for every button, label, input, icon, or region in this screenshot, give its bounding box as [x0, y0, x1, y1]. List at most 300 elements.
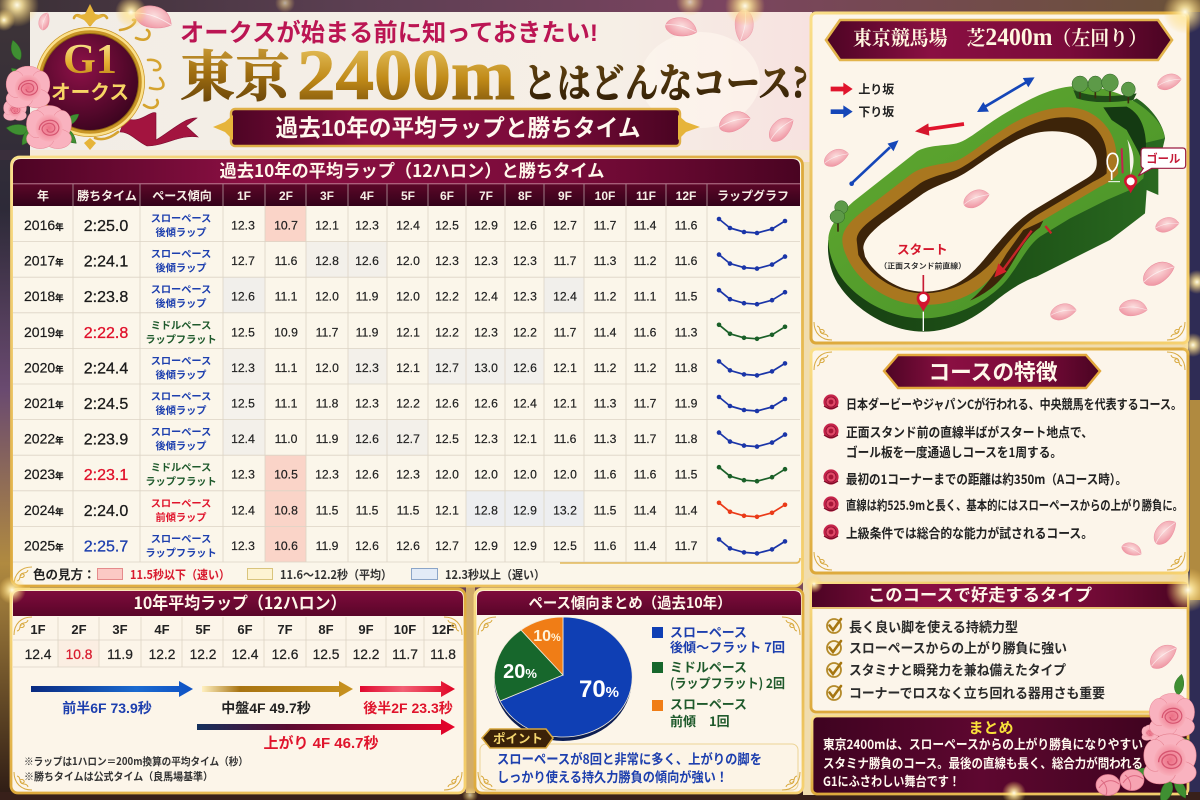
column headers: 1F [237, 189, 251, 203]
legend: downhill [831, 105, 894, 119]
row 2019: 12.2 [435, 325, 459, 339]
row 2020: 12.3 [355, 361, 379, 375]
mini table: 11.8 [430, 647, 456, 662]
summary text: 東京2400mは、スローペースからの上がり勝負になりやすい [823, 734, 1143, 753]
stand recess [1103, 107, 1146, 168]
row 2018 [24, 284, 787, 310]
row 2024: 12.4 [231, 503, 255, 517]
row 2022: 11.6 [554, 432, 577, 446]
feature 2: ゴール板を一度通過しコースを1周する。 [846, 442, 1062, 461]
row 2021: 11.3 [594, 396, 617, 410]
row 2021 [24, 391, 787, 417]
row 2023: 11.6 [594, 468, 617, 482]
feature 5: 上級条件では総合的な能力が試されるコース。 [846, 523, 1093, 542]
row 2025: 12.7 [435, 539, 459, 553]
goal label [1138, 148, 1186, 176]
row 2025: スローペース [151, 533, 211, 545]
row 2019: 11.7 [554, 325, 577, 339]
row 2021: スローペース [151, 391, 211, 403]
badge: G1 オークス [35, 4, 198, 150]
row 2021: 12.3 [355, 396, 379, 410]
mini table: 3F [112, 622, 128, 637]
table title: 過去10年の平均ラップ（12ハロン）と勝ちタイム [220, 158, 604, 183]
row 2025: 12.9 [474, 539, 498, 553]
label: last 4F: 上がり 4F 46.7秒 [264, 734, 378, 752]
row 2025: ラップフラット [145, 547, 217, 559]
row 2016 [24, 213, 787, 239]
column headers: 勝ちタイム [77, 188, 137, 203]
row 2023: 12.0 [513, 468, 537, 482]
pie legend: 後傾〜フラット 7回 [670, 637, 785, 656]
row 2020: 2:24.4 [84, 360, 128, 377]
row 2017: 11.2 [634, 254, 657, 268]
row 2021: 12.6 [435, 396, 459, 410]
subtitle banner [213, 109, 700, 146]
row 2023: 12.0 [435, 468, 459, 482]
column headers: ラップグラフ [717, 188, 789, 203]
row 2018: 2018年 [24, 288, 64, 304]
row 2025: 12.6 [396, 539, 420, 553]
row 2018: 12.6 [231, 290, 255, 304]
row 2025: 11.9 [316, 539, 339, 553]
mini table: 4F [154, 622, 170, 637]
row 2023: 2023年 [24, 466, 64, 482]
column headers: 5F [401, 189, 415, 203]
column headers: 4F [360, 189, 374, 203]
row 2019: 12.3 [474, 325, 498, 339]
row 2021: 2:24.5 [84, 396, 128, 413]
footnotes: ※勝ちタイムは公式タイム（良馬場基準） [24, 769, 213, 784]
row 2021: 11.7 [634, 396, 657, 410]
row 2017: 12.3 [513, 254, 537, 268]
panel: 10-year table [12, 157, 802, 586]
row 2020: 13.0 [474, 361, 498, 375]
row 2024: 12.1 [435, 503, 459, 517]
G1: G1 [63, 37, 117, 83]
row 2021: 12.4 [513, 396, 537, 410]
features banner: コースの特徴 [928, 360, 1058, 385]
corner ornaments [14, 322, 1185, 790]
arrow: descent top [978, 78, 1034, 112]
row 2019: 12.2 [513, 325, 537, 339]
goal post [1107, 153, 1120, 182]
row 2022: 2022年 [24, 431, 64, 447]
row 2016: スローペース [151, 213, 211, 225]
panel title: このコースで好走するタイプ [868, 581, 1092, 606]
row 2016: 12.3 [231, 218, 255, 232]
mini table: 12.2 [353, 647, 379, 662]
course illustration [828, 74, 1186, 332]
row 2025: 11.4 [634, 539, 657, 553]
row 2021: 11.1 [275, 396, 298, 410]
row 2017: 2:24.1 [84, 254, 128, 271]
row 2022: 12.4 [231, 432, 255, 446]
row 2017: 2017年 [24, 253, 64, 269]
cell shading [223, 206, 584, 562]
summary roses [1096, 673, 1196, 800]
row 2020: 11.1 [275, 361, 298, 375]
mini table: 1F [30, 622, 46, 637]
panel: course features [811, 349, 1188, 573]
mini table: 7F [277, 622, 293, 637]
row 2017: 12.6 [355, 254, 379, 268]
row 2024: 12.9 [513, 503, 537, 517]
column headers: ペース傾向 [152, 188, 212, 203]
row 2022: 12.6 [355, 432, 379, 446]
column headers: 9F [558, 189, 572, 203]
turf surface [828, 86, 1164, 318]
row 2020: 後傾ラップ [156, 368, 206, 381]
panel: 10-year average lap [11, 589, 465, 793]
row 2023: ラップフラット [145, 476, 217, 488]
row 2019: 2:22.8 [84, 325, 128, 342]
pie legend: 前傾 1回 [670, 711, 730, 730]
arrow: middle [202, 681, 353, 697]
row 2022: 11.3 [594, 432, 617, 446]
mini table: 11.9 [107, 647, 133, 662]
row 2024: 前傾ラップ [156, 511, 206, 524]
row 2019: ミドルペース [151, 320, 211, 332]
point callout [480, 729, 798, 790]
panel title: 10年平均ラップ（12ハロン） [134, 589, 346, 614]
summary text: G1にふさわしい舞台です！ [823, 771, 960, 790]
row 2024: 10.8 [274, 503, 298, 517]
row 2019: 2019年 [24, 324, 64, 340]
row 2018: 12.4 [553, 290, 577, 304]
start note: （正面スタンド前直線） [879, 261, 966, 271]
row 2024: 12.8 [474, 503, 498, 517]
legend: uphill: 上り坂 [858, 82, 894, 96]
column headers: 2F [279, 189, 293, 203]
mini table: 12.6 [272, 647, 299, 662]
row 2023: 10.5 [274, 468, 298, 482]
mini table: 5F [195, 622, 211, 637]
start label: スタート [897, 243, 948, 257]
row 2020: スローペース [151, 355, 211, 367]
row 2023: 12.6 [355, 468, 379, 482]
row 2016: 11.6 [675, 218, 698, 232]
row 2021: 12.6 [474, 396, 498, 410]
row 2023: ミドルペース [151, 462, 211, 474]
column headers: 10F [595, 189, 615, 203]
trees: left [830, 201, 848, 232]
pie legend: スローペース [670, 694, 747, 713]
arrow: last 2F [360, 681, 455, 697]
row 2020: 12.1 [396, 361, 420, 375]
row 2018: 12.4 [474, 290, 498, 304]
row 2021: 12.5 [231, 396, 255, 410]
sub headline: オークスが始まる前に知っておきたい! [180, 18, 598, 47]
mini table: 10.8 [66, 647, 93, 662]
column headers: 3F [320, 189, 334, 203]
main title [180, 33, 808, 115]
row 2025: 12.3 [231, 539, 255, 553]
goal lines [1122, 148, 1123, 173]
pie chart [494, 617, 632, 741]
row 2020: 12.7 [435, 361, 459, 375]
row 2018: 11.2 [594, 290, 617, 304]
summary text: スタミナ勝負のコース。最後の直線も長く、総合力が問われる [823, 753, 1143, 772]
trees: back straight [1072, 74, 1137, 103]
point badge: ポイント [493, 731, 543, 746]
row 2021: 11.9 [675, 396, 698, 410]
feature 2 [823, 422, 1093, 461]
row 2016: 11.4 [634, 218, 657, 232]
arrow: rise [915, 123, 964, 136]
main title: とはどんなコース? [523, 52, 808, 109]
row 2017: スローペース [151, 249, 211, 261]
gold scrollwork [74, 15, 163, 139]
ribbon [120, 113, 198, 146]
row 2016: 12.9 [474, 218, 498, 232]
mini table: 12.2 [190, 647, 216, 662]
legend: colour key: 色の見方： [33, 564, 96, 583]
arrow: descent left [849, 141, 897, 186]
row 2022: スローペース [151, 427, 211, 439]
row 2025: 11.7 [675, 539, 698, 553]
main title: 2400m [297, 35, 515, 115]
feature 2: 正面スタンド前の直線半ばがスタート地点で、 [846, 422, 1093, 441]
summary text [823, 734, 1143, 790]
row 2019: ラップフラット [145, 334, 217, 346]
row 2016: 12.3 [355, 218, 379, 232]
row 2019: 11.3 [675, 325, 698, 339]
goal pin [1124, 174, 1137, 193]
row 2024: 11.4 [675, 503, 698, 517]
type 4: コーナーでロスなく立ち回れる器用さも重要 [849, 682, 1105, 702]
row 2020: 12.1 [553, 361, 577, 375]
pie legend: ミドルペース [670, 657, 747, 676]
row 2022: 12.3 [474, 432, 498, 446]
header petals [36, 1, 798, 145]
arrow: last 4F [197, 719, 455, 735]
row 2024: 2:24.0 [84, 503, 128, 520]
row 2018: 11.1 [275, 290, 298, 304]
row 2019: 11.7 [316, 325, 339, 339]
row 2022: 11.9 [316, 432, 339, 446]
column headers: 12F [676, 189, 696, 203]
row 2018: 12.0 [315, 290, 339, 304]
pie chart: 10% [533, 628, 561, 645]
legend: downhill: 下り坂 [858, 105, 894, 119]
row 2017: 12.0 [396, 254, 420, 268]
row 2019: 11.4 [594, 325, 617, 339]
type 3: スタミナと瞬発力を兼ね備えたタイプ [849, 659, 1066, 679]
row 2018: 12.2 [435, 290, 459, 304]
row 2023: 12.0 [553, 468, 577, 482]
row 2017: 11.7 [554, 254, 577, 268]
panel: suited type [811, 581, 1188, 712]
arrow: first half [31, 681, 193, 697]
subtitle banner: 過去10年の平均ラップと勝ちタイム [276, 115, 640, 141]
オークス: オークス [51, 81, 129, 104]
row 2023 [24, 462, 787, 488]
row 2024: 11.5 [397, 503, 420, 517]
legend: colour key: 12.3秒以上（遅い） [445, 566, 545, 583]
row 2016: 12.1 [315, 218, 339, 232]
row 2023: 12.3 [231, 468, 255, 482]
row 2024 [24, 498, 787, 524]
point callout: スローペースが8回と非常に多く、上がりの脚を [497, 748, 762, 768]
footnotes [24, 754, 248, 784]
row 2020: 11.8 [675, 361, 698, 375]
row 2017: 12.3 [474, 254, 498, 268]
column headers: 7F [479, 189, 493, 203]
point badge [482, 729, 553, 748]
mini table: 12F [432, 622, 454, 637]
row 2024: 11.5 [316, 503, 339, 517]
row 2023: 12.0 [474, 468, 498, 482]
lower bank wedge [970, 221, 1043, 301]
row 2016: 12.5 [435, 218, 459, 232]
row 2018: 2:23.8 [84, 289, 128, 306]
mini table: 10F [394, 622, 416, 637]
row 2025: 12.6 [355, 539, 379, 553]
row 2017: 12.3 [435, 254, 459, 268]
pie legend [652, 622, 785, 730]
row 2021: 2021年 [24, 395, 64, 411]
column headers: 11F [636, 189, 656, 203]
features banner [884, 355, 1100, 388]
row 2025: 12.5 [553, 539, 577, 553]
row 2024: 13.2 [553, 503, 577, 517]
row 2020 [24, 355, 787, 381]
pie chart: 20% [503, 661, 537, 683]
row 2016: 2:25.0 [84, 218, 128, 235]
label: last 2F: 後半2F 23.3秒 [363, 700, 453, 716]
row 2023: 12.3 [396, 468, 420, 482]
row 2020: 11.2 [634, 361, 657, 375]
row 2024: 11.4 [634, 503, 657, 517]
mini table: 8F [318, 622, 334, 637]
row 2023: 11.5 [675, 468, 698, 482]
row 2019: 11.9 [356, 325, 379, 339]
column headers [37, 184, 789, 206]
column headers: 年 [37, 188, 49, 203]
badge roses [4, 39, 81, 149]
course banner [826, 20, 1172, 60]
legend: colour key: 11.5秒以下（速い） [130, 566, 230, 583]
course banner: 東京競馬場 芝2400m（左回り） [853, 22, 1147, 51]
row 2017: 11.3 [594, 254, 617, 268]
row 2019: 12.5 [231, 325, 255, 339]
row 2016: 後傾ラップ [156, 226, 206, 239]
row 2020: 12.3 [231, 361, 255, 375]
row 2018: 11.1 [634, 290, 657, 304]
row 2023: 11.6 [634, 468, 657, 482]
pie chart: 70% [579, 676, 619, 703]
footnotes: ※ラップは1ハロン＝200m換算の平均タイム（秒） [24, 754, 248, 769]
panel: course map [811, 13, 1188, 343]
row 2021: 11.8 [316, 396, 339, 410]
grid [13, 206, 800, 562]
downhill marker [1002, 226, 1051, 272]
row 2020: 12.6 [513, 361, 537, 375]
row 2021: 12.2 [396, 396, 420, 410]
mini table: 2F [71, 622, 87, 637]
row 2022: 12.7 [396, 432, 420, 446]
turf track [842, 107, 1118, 305]
course wall [828, 98, 1165, 332]
row 2019 [24, 320, 787, 346]
panel: pace summary [475, 589, 803, 793]
summary heading: まとめ [968, 720, 1014, 737]
row 2016: 10.7 [274, 218, 298, 232]
type 1: 長く良い脚を使える持続力型 [849, 616, 1018, 636]
row 2018: 後傾ラップ [156, 297, 206, 310]
row 2018: 11.9 [356, 290, 379, 304]
row 2024: 2024年 [24, 502, 64, 518]
row 2025: 2025年 [24, 537, 64, 553]
row 2017: 11.6 [675, 254, 698, 268]
row 2022 [24, 427, 787, 453]
row 2021: 12.1 [553, 396, 577, 410]
row 2018: 11.5 [675, 290, 698, 304]
column headers: 6F [440, 189, 454, 203]
row 2020: 11.2 [594, 361, 617, 375]
panel: summary [812, 716, 1188, 794]
row 2016: 12.4 [396, 218, 420, 232]
row 2024: 11.5 [594, 503, 617, 517]
row 2022: 11.8 [675, 432, 698, 446]
row 2022: 11.7 [634, 432, 657, 446]
row 2023: 2:23.1 [84, 467, 128, 484]
row 2017: 後傾ラップ [156, 262, 206, 275]
row 2017 [24, 249, 787, 275]
start pin [917, 275, 930, 331]
mini table: 11.7 [392, 647, 418, 662]
row 2018: スローペース [151, 284, 211, 296]
row 2022: 2:23.9 [84, 432, 128, 449]
course petals [821, 71, 1183, 322]
legend: colour key: 11.6〜12.2秒（平均） [280, 566, 392, 583]
header band [0, 12, 812, 162]
label: first half: 前半6F 73.9秒 [62, 700, 152, 716]
row 2017: 12.7 [231, 254, 255, 268]
row 2019: 10.9 [274, 325, 298, 339]
row 2023: 12.3 [315, 468, 339, 482]
row 2025: 11.6 [594, 539, 617, 553]
row 2022: 12.5 [435, 432, 459, 446]
row 2017: 11.6 [275, 254, 298, 268]
row 2025: 2:25.7 [84, 538, 128, 555]
mini table [13, 617, 463, 667]
row 2022: 後傾ラップ [156, 440, 206, 453]
row 2024: スローペース [151, 498, 211, 510]
row 2016: 12.7 [553, 218, 577, 232]
row 2018: 12.3 [513, 290, 537, 304]
legend: colour key [33, 564, 545, 583]
infield [863, 131, 1097, 292]
row 2022: 11.0 [275, 432, 298, 446]
main title: 東京 [180, 33, 291, 112]
pie legend: スローペース [670, 622, 747, 641]
mini table: 12.5 [313, 647, 340, 662]
row 2018: 12.0 [396, 290, 420, 304]
row 2025 [24, 533, 787, 559]
mini table: 12.2 [149, 647, 175, 662]
goal label: ゴール [1146, 152, 1180, 166]
row 2020: 12.0 [315, 361, 339, 375]
row 2016: 11.7 [594, 218, 617, 232]
row 2019: 11.6 [634, 325, 657, 339]
mini table: 9F [358, 622, 374, 637]
panel title: ペース傾向まとめ（過去10年） [528, 592, 732, 613]
stand blade [1127, 139, 1134, 175]
type 2: スローペースからの上がり勝負に強い [849, 637, 1067, 657]
row 2016: 12.6 [513, 218, 537, 232]
mini table: 6F [237, 622, 253, 637]
